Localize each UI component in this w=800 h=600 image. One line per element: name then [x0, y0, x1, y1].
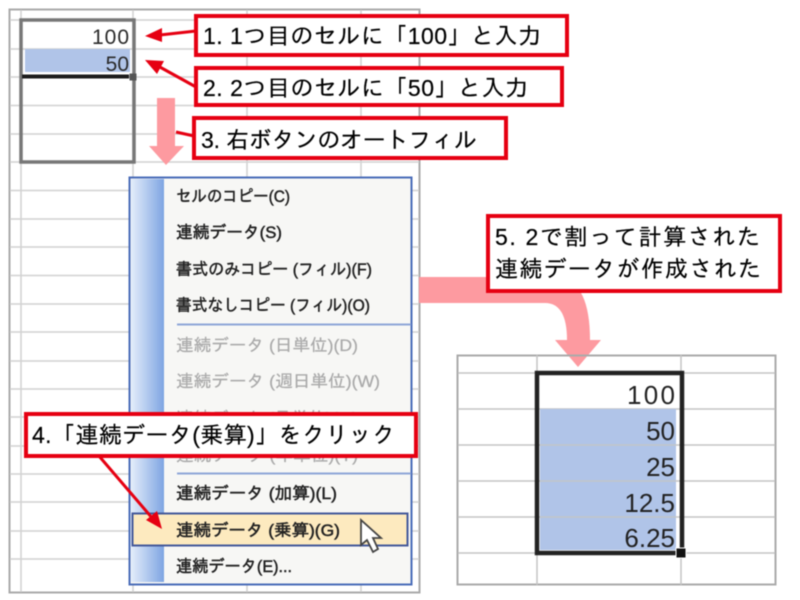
disabled menu item: 連続データ (月単位)(M)	[176, 409, 358, 428]
result value 6.25: 6.25	[624, 523, 675, 553]
highlighted cell: 50	[25, 49, 130, 72]
disabled menu item: 連続データ (週日単位)(W)	[176, 372, 380, 391]
connector: callout 3	[176, 132, 194, 136]
result value 12.5: 12.5	[624, 488, 675, 518]
menu item: 連続データ (加算)(L)	[176, 484, 337, 503]
icon: mouse cursor	[361, 520, 381, 552]
menu item: セルのコピー(C)	[176, 187, 290, 206]
highlighted result cells	[540, 409, 676, 550]
arrow: callout 1	[145, 28, 196, 42]
panel: result table	[458, 355, 776, 585]
result value 100: 100	[627, 380, 675, 410]
callout 3: 3. 右ボタンのオートフィル	[201, 127, 477, 153]
callout 5: 連続データが作成された	[495, 256, 761, 282]
menu item: 連続データ(E)...	[176, 557, 292, 576]
highlighted menu item: 連続データ (乗算)(G)	[176, 521, 340, 540]
callout 5: 5. 2で割って計算された	[495, 224, 760, 250]
callout 4: 4.「連続データ(乗算)」をクリック	[32, 422, 395, 448]
callout 4	[26, 414, 416, 456]
result value 50: 50	[646, 416, 675, 446]
arrow: callout 4	[99, 456, 162, 529]
cell value 50: 50	[106, 53, 129, 76]
autofill range selection	[21, 20, 136, 162]
arrow: to result table	[419, 277, 601, 367]
disabled menu item: 連続データ (日単位)(D)	[176, 336, 358, 355]
callout 5	[488, 216, 780, 291]
panel: context menu	[130, 178, 412, 584]
menu item: 書式なしコピー (フィル)(O)	[176, 296, 370, 315]
arrow: autofill drag down	[149, 98, 184, 165]
callout 2: 2. 2つ目のセルに「50」と入力	[203, 75, 528, 101]
panel: worksheet before autofill	[10, 10, 420, 592]
cell value 100: 100	[92, 26, 129, 49]
result value 25: 25	[646, 452, 675, 482]
disabled menu item: 連続データ (年単位)(Y)	[176, 446, 358, 465]
menu item: 書式のみコピー (フィル)(F)	[176, 260, 372, 279]
result selection border	[537, 373, 686, 558]
menu item: 連続データ(S)	[176, 223, 282, 242]
callout 1: 1. 1つ目のセルに「100」と入力	[203, 23, 541, 49]
callout 1	[196, 16, 567, 55]
callout 2	[196, 68, 562, 105]
callout 3	[194, 118, 506, 158]
arrow: callout 2	[145, 60, 196, 87]
highlighted menu item	[132, 514, 408, 546]
